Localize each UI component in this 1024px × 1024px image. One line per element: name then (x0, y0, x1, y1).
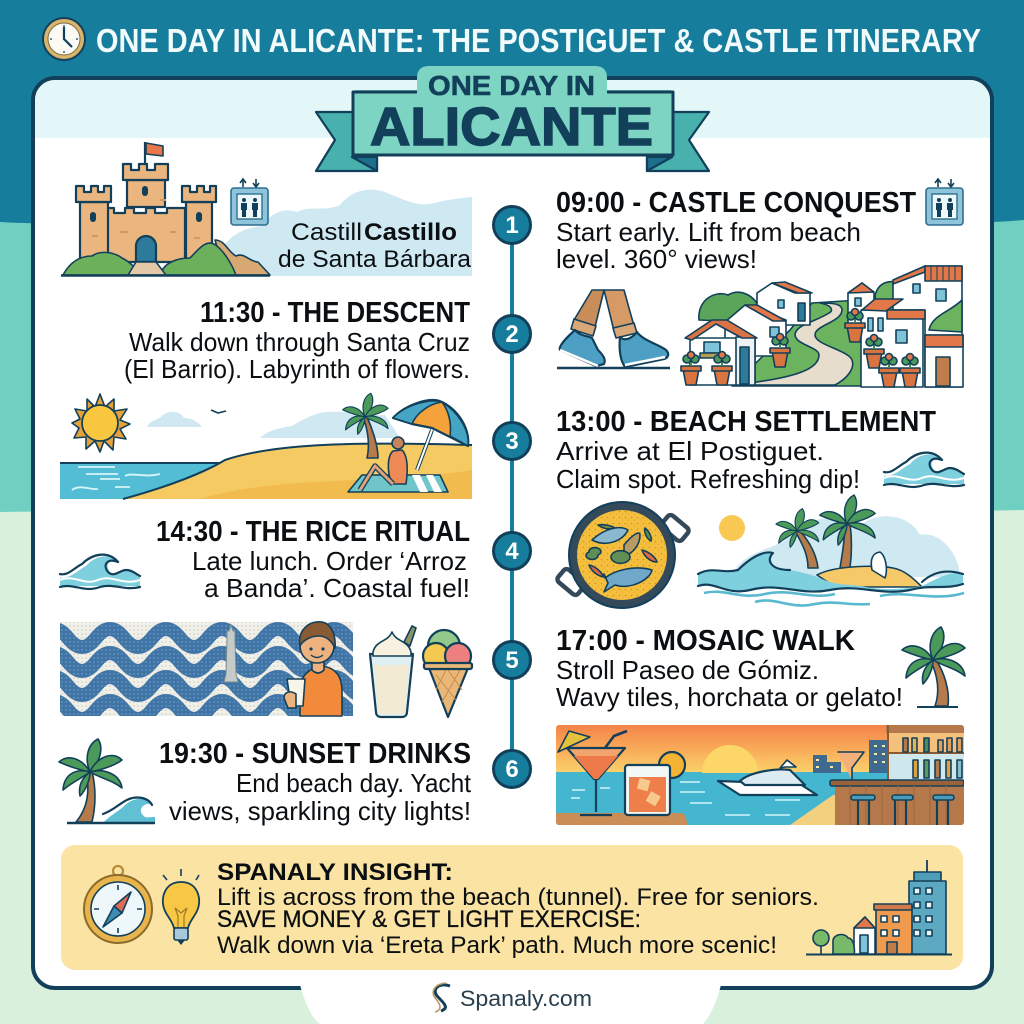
step 4 text: a Banda’. Coastal fuel! (204, 573, 470, 603)
step 5 text: Stroll Paseo de Gómiz. (556, 655, 819, 685)
step number 5 (494, 642, 530, 678)
island palms (776, 495, 875, 568)
paella pan (556, 502, 690, 608)
castle (61, 142, 270, 276)
clock icon (43, 18, 85, 60)
step 6 text: views, sparkling city lights! (169, 796, 471, 826)
step number 3 (494, 422, 530, 460)
castle illustration (61, 142, 472, 276)
insight text (217, 859, 819, 959)
timeline (494, 206, 530, 788)
step 1 text: Start early. Lift from beach (556, 217, 861, 247)
castle caption: Castill (291, 219, 362, 246)
step 1 text (556, 187, 916, 274)
step 5 text: 17:00 - MOSAIC WALK (556, 625, 855, 657)
banner line one: ONE DAY IN (428, 70, 595, 101)
insight text: Walk down via ‘Ereta Park’ path. Much more scenic! (217, 932, 777, 959)
icon: walking feet (557, 290, 670, 368)
beach illustration (60, 393, 472, 499)
icon: wave left (60, 555, 140, 589)
insight text: Lift is across from the beach (tunnel). Free for seniors. (217, 884, 819, 911)
insight text: SAVE MONEY & GET LIGHT EXERCISE: (217, 906, 641, 933)
step 6 text: 19:30 - SUNSET DRINKS (159, 738, 471, 770)
castle caption: de Santa Bárbara (278, 246, 472, 273)
ice cream cone (423, 630, 472, 717)
house front (685, 320, 757, 385)
icon: city (806, 860, 952, 954)
sea (60, 463, 240, 499)
houses right (848, 266, 963, 387)
step 2 text: (El Barrio). Labyrinth of flowers. (124, 354, 470, 384)
step 2 text: Walk down through Santa Cruz (129, 327, 470, 357)
small glass (838, 752, 864, 781)
icon: wave right (884, 453, 964, 487)
step 3 text: 13:00 - BEACH SETTLEMENT (556, 406, 936, 438)
person with drink (284, 622, 342, 716)
flower pots (681, 308, 920, 387)
step 5 text (556, 625, 903, 712)
icon: light bulb (163, 869, 199, 945)
step number 1: 1 (505, 212, 519, 239)
step 4 text: 14:30 - THE RICE RITUAL (156, 516, 470, 548)
cocktail (558, 731, 627, 815)
monument (224, 625, 238, 682)
tumbler (625, 752, 685, 815)
step number 3: 3 (505, 428, 519, 455)
sun (72, 394, 130, 452)
icon: palm and wave (59, 739, 155, 823)
step 4 text: Late lunch. Order ‘Arroz (192, 546, 467, 576)
sand (123, 444, 472, 499)
step 3 text: Arrive at El Postiguet. (556, 436, 824, 466)
skyline (813, 740, 892, 773)
sea glints (571, 782, 800, 815)
island sun (719, 515, 745, 541)
ribbon tails (316, 112, 709, 171)
bar counter (830, 780, 965, 825)
beach palm (343, 393, 388, 458)
castle caption (278, 219, 472, 273)
step number 5: 5 (505, 647, 519, 674)
house middle (725, 305, 786, 356)
step number 2 (494, 316, 530, 352)
waves (698, 552, 964, 606)
icon: compass (84, 866, 152, 943)
banner line two: ALICANTE (370, 97, 653, 157)
clouds (147, 412, 202, 427)
step 2 text: 11:30 - THE DESCENT (200, 297, 470, 329)
step 1 text: level. 360° views! (556, 244, 757, 274)
step number 2: 2 (505, 321, 519, 348)
village illustration (681, 266, 963, 387)
cloud backdrop (215, 190, 472, 276)
insight text: SPANALY INSIGHT: (217, 859, 453, 886)
island sand (817, 566, 922, 587)
island cloud (735, 516, 960, 577)
bird (211, 410, 226, 413)
step 6 text (159, 738, 472, 826)
sunbather (360, 437, 407, 490)
step 4 text (156, 516, 470, 603)
step 5 text: Wavy tiles, horchata or gelato! (556, 682, 903, 712)
step number 6 (494, 750, 530, 788)
horchata cup (370, 626, 416, 717)
footer url: Spanaly.com (460, 986, 592, 1011)
sunset scene (556, 725, 965, 825)
step 1 text: 09:00 - CASTLE CONQUEST (556, 187, 916, 219)
mosaic pavement (60, 621, 353, 717)
banner title (316, 66, 709, 171)
sand (556, 813, 687, 825)
towel (348, 475, 448, 492)
step number 4: 4 (505, 538, 519, 565)
surfer (871, 552, 886, 578)
insight panel (61, 845, 963, 970)
bar shelves (886, 725, 964, 780)
icon: lift (926, 179, 963, 225)
footer notch (300, 983, 721, 1024)
step 6 text: End beach day. Yacht (236, 768, 472, 798)
yacht (718, 760, 817, 795)
step number 1 (494, 206, 530, 244)
footer logo (433, 983, 450, 1012)
step 2 text (124, 297, 470, 384)
fish (586, 525, 657, 592)
step number 4 (494, 532, 530, 570)
step 3 text (556, 406, 936, 494)
step number 6: 6 (505, 756, 519, 783)
castle caption: Castillo (364, 219, 457, 246)
winding path (732, 303, 853, 385)
step 3 text: Claim spot. Refreshing dip! (556, 464, 860, 494)
icon: palm right (902, 627, 965, 707)
island illustration (698, 495, 964, 606)
house back centre (757, 282, 812, 325)
lift icon (231, 179, 268, 225)
umbrella (393, 400, 468, 470)
